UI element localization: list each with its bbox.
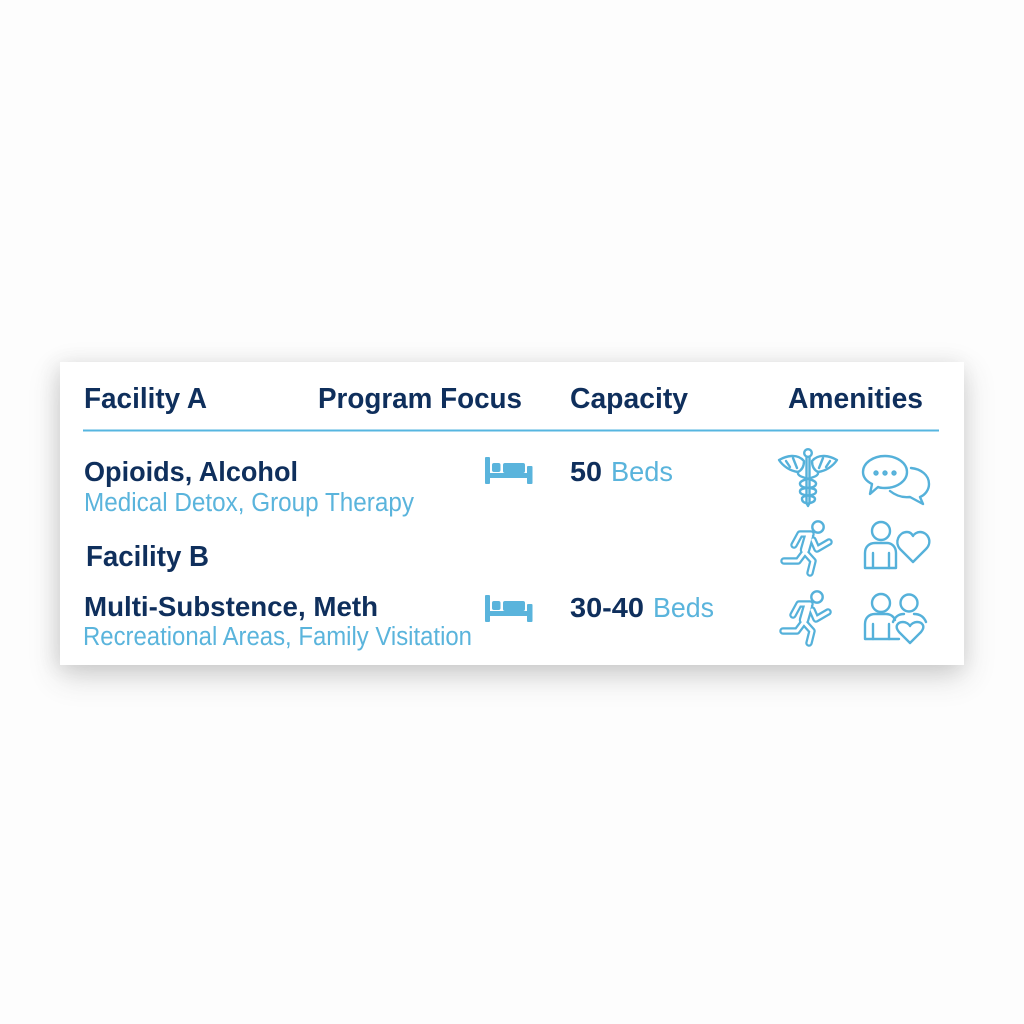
heading: Facility B: Facility B bbox=[86, 541, 209, 573]
header divider bbox=[83, 430, 939, 432]
text block: Facility B programs: Multi-Substence, Meth bbox=[84, 591, 378, 622]
heading: Capacity: Capacity bbox=[570, 383, 688, 415]
text block: Facility A programs: Opioids, Alcohol bbox=[84, 456, 298, 487]
header row bbox=[84, 383, 923, 415]
capacity: 30-40 Beds bbox=[570, 592, 714, 623]
icon: caduceus bbox=[779, 449, 837, 506]
capacity: 30-40 Beds: Beds bbox=[653, 592, 714, 623]
icon: runner, row 2 bbox=[784, 521, 829, 573]
icon: runner, row 3 bbox=[783, 591, 828, 643]
panel: comparison card bbox=[60, 362, 964, 665]
text block: Facility B programs: Recreational Areas, Family Visitation bbox=[83, 623, 472, 651]
heading: Amenities: Amenities bbox=[788, 383, 923, 415]
icon: bed, Facility A bbox=[485, 457, 532, 484]
capacity: 30-40 Beds: 30-40 bbox=[570, 592, 644, 623]
icon: speech bubbles bbox=[863, 456, 929, 504]
capacity: 50 Beds: 50 bbox=[570, 456, 602, 487]
text block: Facility B programs bbox=[83, 591, 472, 651]
icon: bed, Facility B bbox=[485, 595, 532, 622]
text block: Facility A programs: Medical Detox, Group Therapy bbox=[84, 489, 414, 517]
icon: person with heart bbox=[865, 522, 929, 568]
heading: Facility A: Facility A bbox=[84, 383, 207, 415]
icon: family with heart bbox=[865, 594, 926, 643]
capacity: 50 Beds: Beds bbox=[611, 456, 673, 487]
heading: Program Focus: Program Focus bbox=[318, 383, 522, 415]
text block: Facility A programs bbox=[84, 456, 414, 517]
capacity: 50 Beds bbox=[570, 456, 673, 487]
